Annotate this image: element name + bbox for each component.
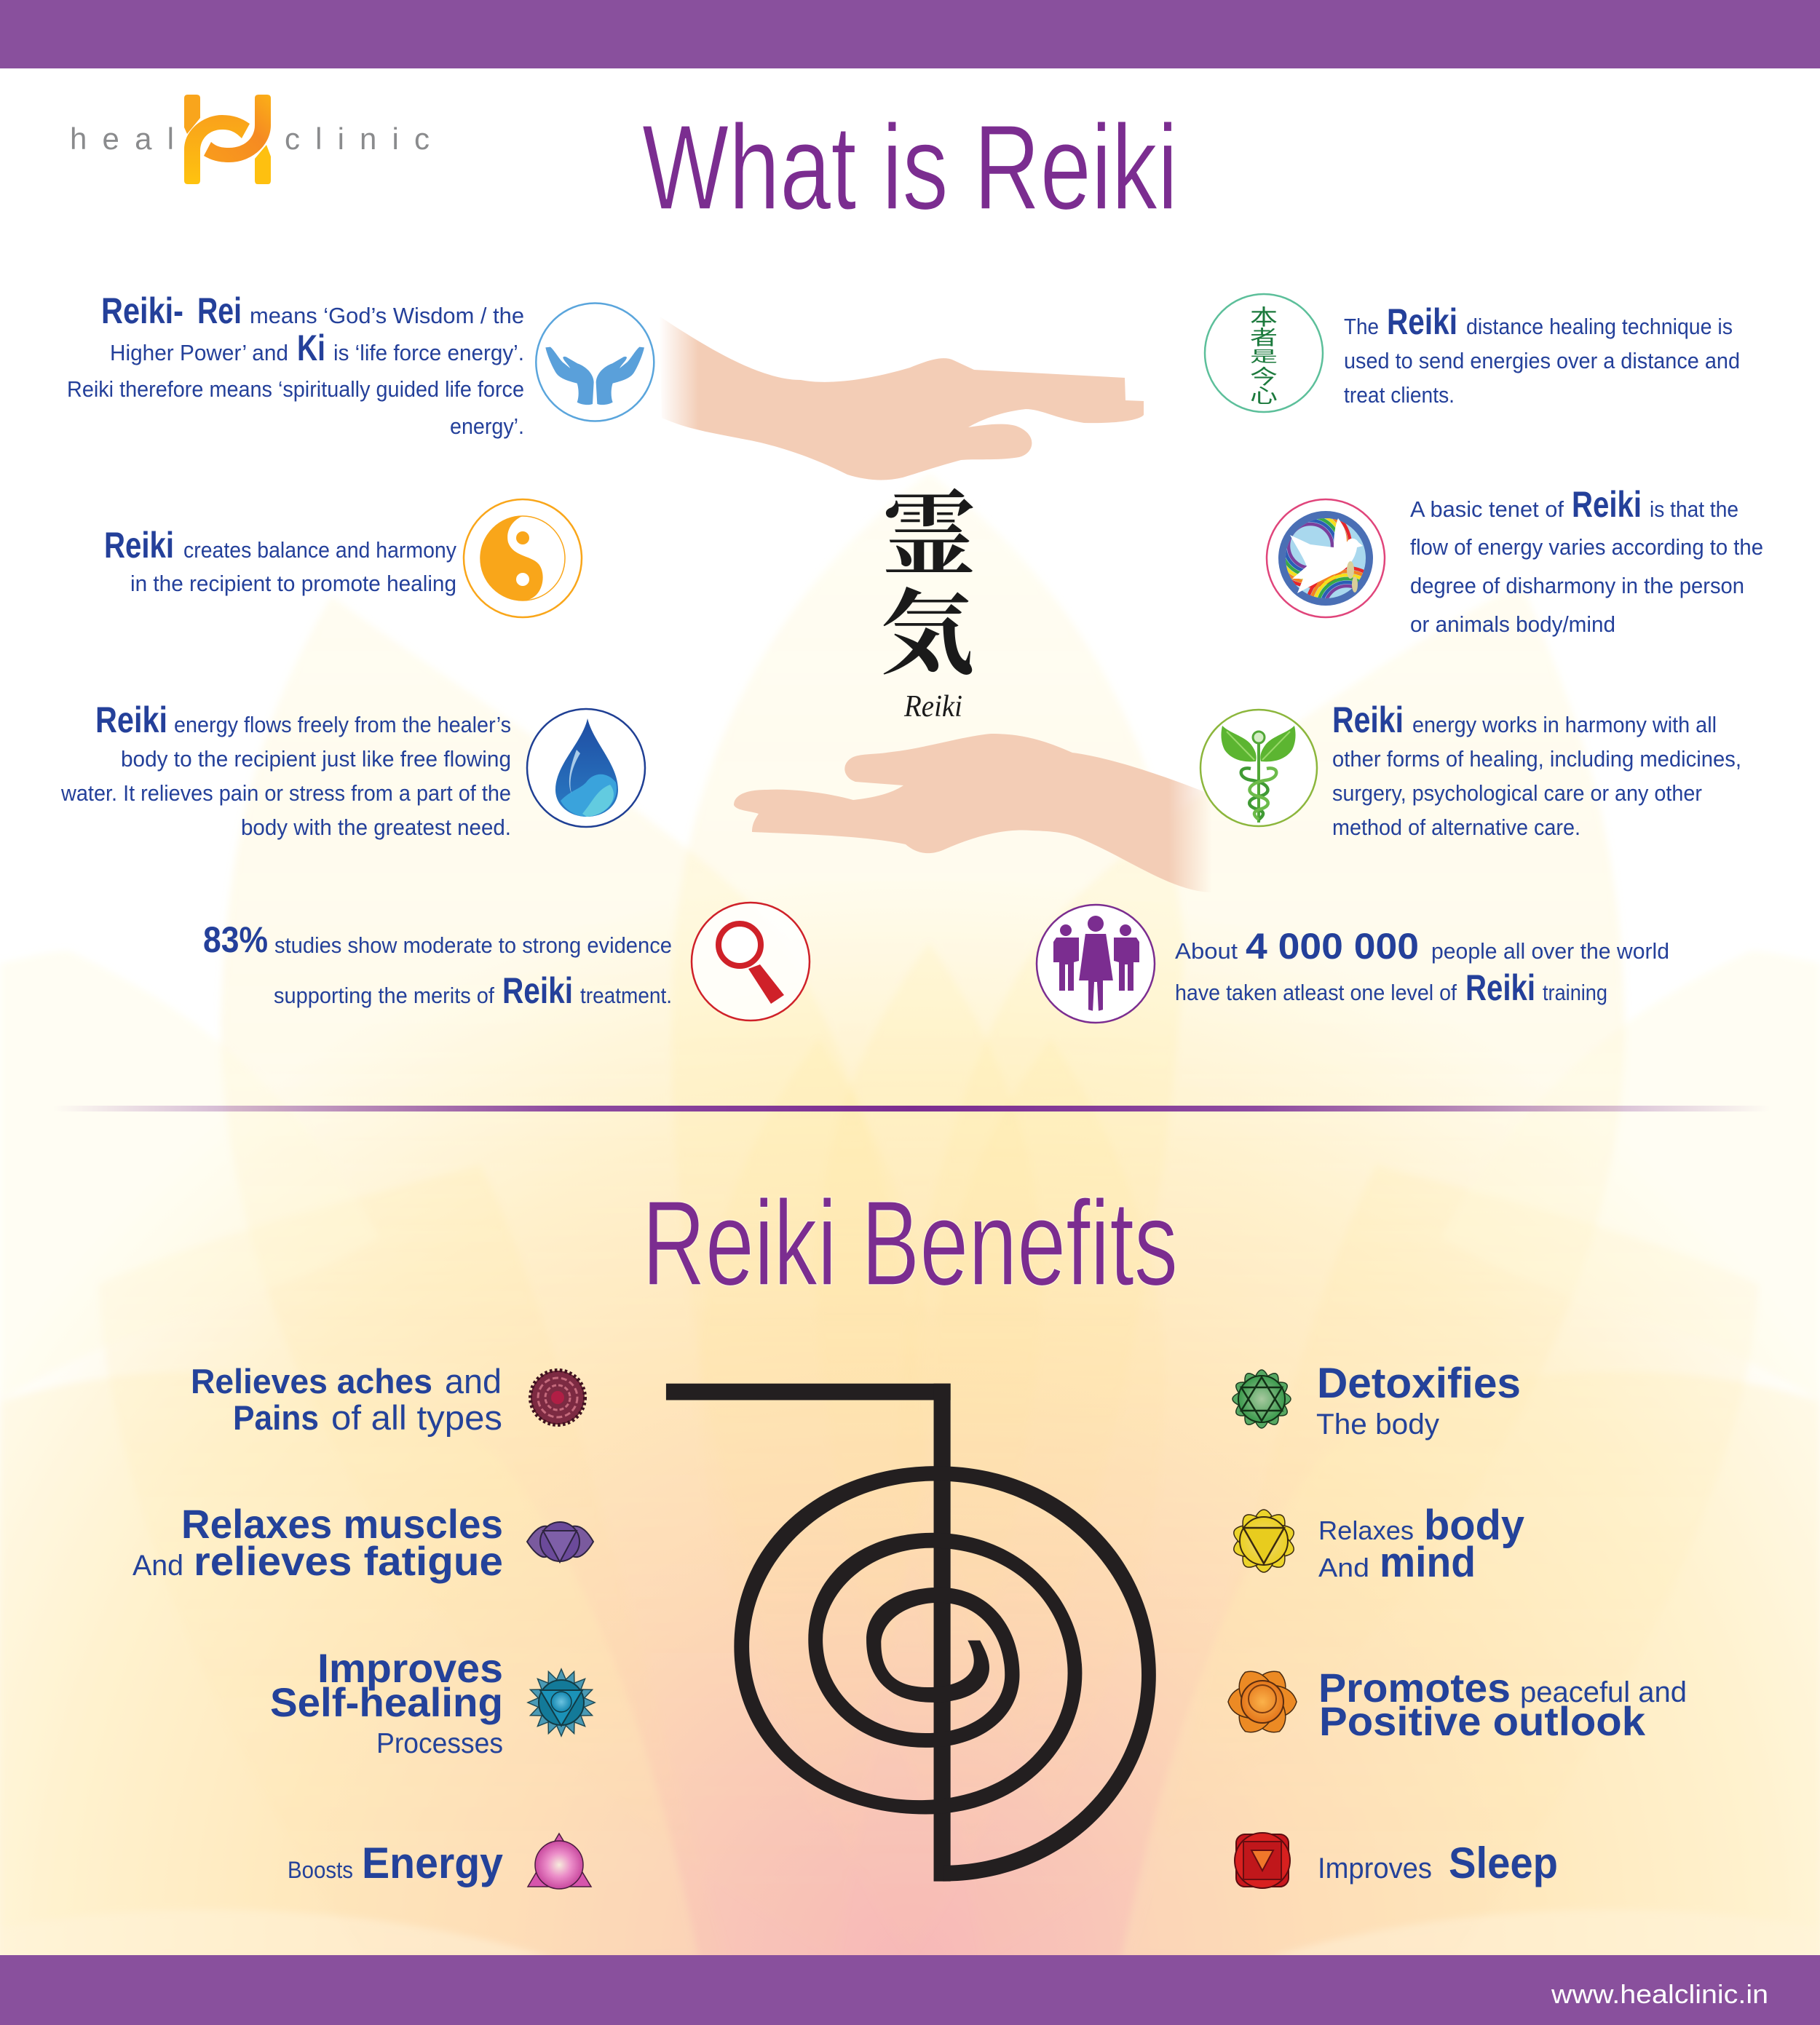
benefit: detoxifies: The body <box>1316 1408 1439 1441</box>
benefit: relaxes body and mind <box>1318 1502 1524 1586</box>
text block: Reiki meaning: Reiki therefore means ‘spiritually guided life force <box>67 376 524 402</box>
icon: pink chakra <box>528 1834 591 1889</box>
lower hand illustration <box>734 734 1212 892</box>
text block: distance healing <box>1344 301 1740 408</box>
text block: works with other healing: method of alternative care. <box>1332 815 1580 840</box>
text block: distance healing: Reiki <box>1387 301 1457 342</box>
benefit: relaxes body and mind: Relaxes <box>1318 1515 1414 1545</box>
text block: free flowing water: body with the greatest need. <box>241 815 511 840</box>
bottom purple band with website: www.healclinic.in <box>1551 1979 1768 2009</box>
logo: healclinic: clinic <box>285 122 430 156</box>
benefit: relieves aches: of all types <box>331 1398 502 1437</box>
text block: 4 000 000 people: people all over the world <box>1431 938 1669 964</box>
text block: distance healing: The <box>1344 314 1379 339</box>
benefit: promotes positive outlook <box>1318 1665 1687 1744</box>
text block: 83% studies: studies show moderate to strong evidence <box>274 932 672 958</box>
benefit: relaxes muscles: And <box>132 1550 183 1582</box>
bottom purple band with website <box>0 1955 1820 2025</box>
Cho Ku Rei symbol <box>666 1384 1156 1882</box>
text block: works with other healing <box>1332 700 1741 840</box>
title: What is Reiki: What is Reiki <box>642 100 1178 235</box>
text block: distance healing: treat clients. <box>1344 382 1455 408</box>
text block: 4 000 000 people: About <box>1175 938 1238 964</box>
text block: flow of energy: Reiki <box>1572 484 1642 525</box>
benefit: promotes positive outlook: peaceful and <box>1520 1676 1687 1708</box>
benefit: promotes positive outlook: Positive outlook <box>1319 1698 1646 1744</box>
text block: flow of energy: or animals body/mind <box>1410 611 1615 637</box>
text block: balance and harmony <box>104 525 456 596</box>
text block: 4 000 000 people: have taken atleast one level of <box>1175 980 1457 1005</box>
benefit: promotes positive outlook: Promotes <box>1318 1665 1511 1711</box>
text block: 83% studies: 83% <box>203 919 268 960</box>
benefit: relaxes muscles: Relaxes muscles <box>181 1501 503 1547</box>
benefit: improves sleep <box>1318 1839 1558 1887</box>
icon: distance healing symbol <box>1205 294 1323 412</box>
text block: Reiki meaning <box>67 290 524 439</box>
icon: open hands <box>536 303 654 421</box>
text block: free flowing water: water. It relieves pain or stress from a part of the <box>60 780 511 806</box>
text block: 4 000 000 people: 4 000 000 <box>1246 926 1419 967</box>
text block: free flowing water: energy flows freely from the healer’s <box>174 712 511 737</box>
kanji: Rei Ki with script label: 霊 <box>882 461 976 595</box>
text block: 4 000 000 people <box>1175 926 1669 1008</box>
text block: free flowing water <box>60 700 511 840</box>
text block: 83% studies: Reiki <box>502 970 573 1011</box>
benefit: relaxes body and mind: And <box>1318 1553 1369 1582</box>
text block: balance and harmony: creates balance and harmony <box>183 537 456 563</box>
text block: 83% studies <box>203 919 672 1011</box>
benefit: relieves aches: Pains <box>233 1398 319 1437</box>
text block: works with other healing: energy works in harmony with all <box>1412 712 1717 737</box>
icon: yin yang <box>464 499 582 617</box>
text block: works with other healing: Reiki <box>1332 700 1404 740</box>
top purple band <box>0 0 1820 68</box>
text block: Reiki meaning: is ‘life force energy’. <box>333 340 524 365</box>
icon: throat chakra <box>528 1669 595 1736</box>
text block: Reiki meaning: means ‘God’s Wisdom / the <box>250 303 524 328</box>
benefit: relieves aches: and <box>445 1362 502 1400</box>
benefit: improves self-healing <box>270 1645 503 1759</box>
icon: distance healing symbol: 是 <box>1250 349 1278 365</box>
text block: Reiki meaning: Reiki- <box>101 290 183 331</box>
benefit: improves self-healing: Improves <box>317 1645 503 1691</box>
benefit: improves self-healing: Self-healing <box>270 1679 503 1725</box>
text block: 4 000 000 people: Reiki <box>1465 967 1535 1008</box>
benefit: improves self-healing: Processes <box>376 1728 503 1759</box>
benefit: boosts energy: Energy <box>362 1839 504 1887</box>
benefit: improves sleep: Improves <box>1318 1852 1432 1885</box>
text block: 4 000 000 people: training <box>1543 980 1607 1005</box>
text block: flow of energy: degree of disharmony in the person <box>1410 573 1744 598</box>
icon: third eye chakra <box>527 1522 593 1562</box>
icon: heart chakra <box>1233 1370 1291 1428</box>
benefit: boosts energy: Boosts <box>288 1857 353 1883</box>
upper hand illustration <box>659 316 1144 480</box>
icon: distance healing symbol: 者 <box>1250 327 1278 349</box>
text block: flow of energy <box>1410 484 1763 637</box>
benefit: relieves aches: Relieves aches <box>191 1362 432 1400</box>
text block: flow of energy: flow of energy varies according to the <box>1410 534 1763 560</box>
text block: works with other healing: other forms of healing, including medicines, <box>1332 746 1741 772</box>
benefit: relaxes muscles: relieves fatigue <box>194 1538 503 1584</box>
text block: 83% studies: treatment. <box>580 983 672 1008</box>
benefit: relaxes muscles <box>132 1501 503 1584</box>
icon: distance healing symbol: 本 <box>1250 306 1278 330</box>
icon: water drop <box>527 709 645 827</box>
icon: people group <box>1037 905 1155 1023</box>
text block: 83% studies: supporting the merits of <box>274 983 494 1008</box>
icon: dove and rainbows <box>1265 498 1386 619</box>
benefit: improves sleep: Sleep <box>1449 1839 1558 1887</box>
text block: distance healing: used to send energies over a distance and <box>1344 348 1740 373</box>
text block: Reiki meaning: Higher Power’ and <box>110 340 288 365</box>
text block: free flowing water: Reiki <box>95 700 167 740</box>
kanji: Rei Ki with script label <box>881 461 976 724</box>
text block: Reiki meaning: Rei <box>197 290 242 331</box>
text block: Reiki meaning: Ki <box>297 328 325 368</box>
logo: healclinic: heal <box>70 122 174 156</box>
benefit: relaxes body and mind: mind <box>1380 1539 1476 1586</box>
text block: free flowing water: body to the recipient just like free flowing <box>121 746 511 772</box>
benefit: relaxes body and mind: body <box>1424 1502 1524 1549</box>
icon: root chakra <box>1235 1833 1290 1888</box>
benefit: detoxifies <box>1316 1360 1521 1441</box>
icon: sacral chakra <box>1213 1653 1312 1751</box>
icon: magnifying glass <box>692 903 810 1021</box>
kanji: Rei Ki with script label: 気 <box>881 559 974 693</box>
icon: crown chakra <box>531 1371 585 1424</box>
icon: caduceus <box>1200 710 1317 826</box>
text block: flow of energy: is that the <box>1650 496 1738 522</box>
benefit: relieves aches <box>191 1362 502 1437</box>
text block: balance and harmony: in the recipient to promote healing <box>130 571 456 596</box>
text block: balance and harmony: Reiki <box>104 525 174 566</box>
text block: flow of energy: A basic tenet of <box>1410 496 1564 522</box>
kanji: Rei Ki with script label: Reiki <box>903 690 962 724</box>
text block: distance healing: distance healing technique is <box>1466 314 1733 339</box>
benefit: detoxifies: Detoxifies <box>1317 1360 1521 1407</box>
icon: distance healing symbol: 心 <box>1250 385 1278 408</box>
section divider <box>52 1106 1770 1111</box>
logo: healclinic <box>70 95 430 184</box>
icon: distance healing symbol: 今 <box>1250 366 1278 389</box>
text block: Reiki meaning: energy’. <box>450 413 524 439</box>
text block: works with other healing: surgery, psychological care or any other <box>1332 780 1702 806</box>
heading: Reiki Benefits: Reiki Benefits <box>642 1176 1178 1311</box>
icon: solar plexus chakra <box>1231 1510 1297 1572</box>
benefit: boosts energy <box>288 1839 504 1887</box>
